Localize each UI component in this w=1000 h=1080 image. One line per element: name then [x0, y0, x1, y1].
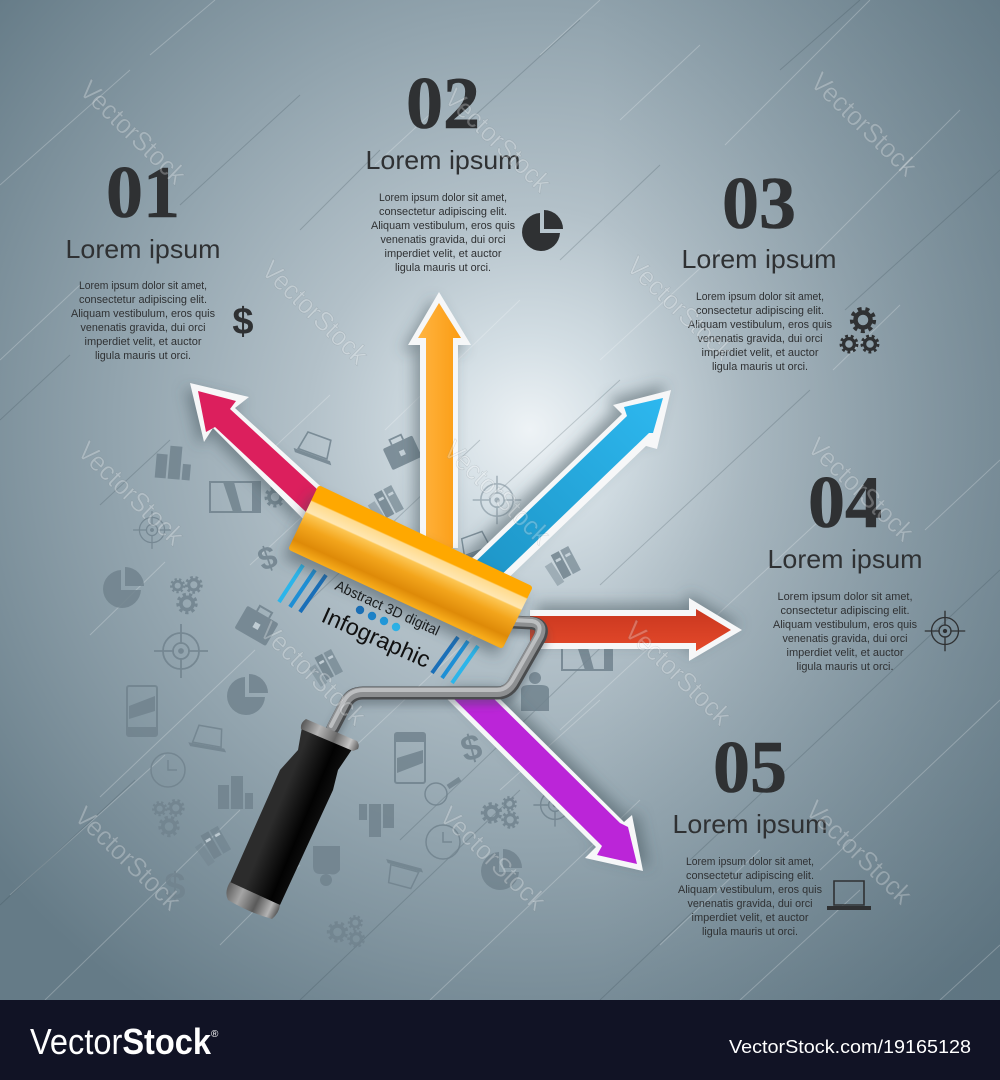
text 03: ligula mauris ut orci. — [712, 361, 808, 373]
text 01: Aliquam vestibulum, eros quis — [71, 308, 215, 320]
watermarks: VectorStock — [802, 432, 920, 547]
handle end cap — [226, 882, 280, 919]
icon: target — [925, 611, 965, 651]
footer bar — [0, 1000, 1000, 1080]
label: Abstract 3D digital: Abstract 3D digital — [332, 578, 442, 640]
background business icons: $ — [456, 725, 486, 770]
text 02: ligula mauris ut orci. — [395, 262, 491, 274]
text 03 — [688, 291, 832, 373]
watermarks: VectorStock — [438, 435, 556, 550]
watermarks: VectorStock — [619, 616, 737, 731]
watermarks: VectorStock — [434, 801, 552, 916]
text 01: venenatis gravida, dui orci — [80, 322, 206, 334]
heading 03: Lorem ipsum — [682, 244, 836, 274]
block 01 — [66, 152, 254, 362]
background business icons: $ — [253, 538, 282, 578]
roller cylinder — [292, 489, 529, 645]
arrow 1: pink — [185, 383, 330, 531]
watermarks: VectorStock — [256, 255, 374, 370]
handle collar — [301, 719, 359, 751]
text 05: Lorem ipsum dolor sit amet, — [686, 856, 814, 868]
watermarks: VectorStock — [69, 801, 187, 916]
text 01: ligula mauris ut orci. — [95, 350, 191, 362]
text 02: imperdiet velit, et auctor — [384, 248, 502, 260]
block 03 — [682, 163, 878, 373]
text 04: consectetur adipiscing elit. — [780, 605, 910, 617]
arrow 5: purple — [440, 688, 649, 871]
watermarks: VectorStock — [439, 83, 557, 198]
paint roller — [226, 489, 541, 919]
block 05 — [672, 727, 871, 938]
text 04 — [773, 591, 917, 673]
text 04: imperdiet velit, et auctor — [786, 647, 904, 659]
heading 05: Lorem ipsum — [672, 809, 828, 839]
roller frame wire — [331, 620, 541, 734]
text 02: venenatis gravida, dui orci — [380, 234, 506, 246]
text 05 — [678, 856, 822, 938]
text 05: Aliquam vestibulum, eros quis — [678, 884, 822, 896]
text 04: Lorem ipsum dolor sit amet, — [778, 591, 912, 603]
number 04: 04 — [808, 462, 882, 544]
background business icons: $ — [164, 866, 186, 908]
text 05: imperdiet velit, et auctor — [692, 912, 809, 924]
watermarks: VectorStock — [621, 251, 739, 366]
text 01: imperdiet velit, et auctor — [84, 336, 202, 348]
text 03: venenatis gravida, dui orci — [698, 333, 822, 345]
text 03: Aliquam vestibulum, eros quis — [688, 319, 832, 331]
text 01: Lorem ipsum dolor sit amet, — [79, 280, 207, 292]
arrow 2: orange — [402, 292, 471, 554]
label: Infographic: Infographic — [318, 602, 435, 673]
text 02: Aliquam vestibulum, eros quis — [371, 220, 515, 232]
decorative blue stripes right — [432, 637, 478, 683]
watermarks: VectorStock — [74, 75, 192, 190]
icon: laptop — [827, 881, 871, 910]
roller shadow — [283, 494, 526, 656]
number 01: 01 — [106, 152, 180, 234]
text 04: venenatis gravida, dui orci — [782, 633, 908, 645]
background business icons — [103, 429, 612, 946]
text 01 — [71, 280, 215, 362]
heading 02: Lorem ipsum — [366, 145, 520, 175]
text 04: ligula mauris ut orci. — [796, 661, 894, 673]
heading 04: Lorem ipsum — [768, 544, 922, 574]
watermarks: VectorStock — [72, 436, 190, 551]
decorative blue stripes left — [279, 565, 326, 612]
text 04: Aliquam vestibulum, eros quis — [773, 619, 917, 631]
icon: dollar: $ — [232, 301, 254, 343]
watermarks: VectorStock — [805, 67, 923, 182]
footer image id: VectorStock.com/19165128 — [729, 1037, 971, 1057]
watermarks: VectorStock — [800, 795, 918, 910]
footer registered mark: ® — [211, 1029, 219, 1040]
watermarks: VectorStock — [254, 616, 372, 731]
heading 01: Lorem ipsum — [66, 234, 220, 264]
text 02 — [371, 192, 515, 274]
block 02 — [366, 63, 563, 274]
text 03: Lorem ipsum dolor sit amet, — [696, 291, 824, 303]
text 05: consectetur adipiscing elit. — [686, 870, 814, 882]
text 02: Lorem ipsum dolor sit amet, — [379, 192, 507, 204]
watermarks — [69, 67, 923, 916]
text 05: venenatis gravida, dui orci — [688, 898, 812, 910]
dots — [356, 606, 400, 631]
icon: pie chart — [522, 210, 563, 251]
text 05: ligula mauris ut orci. — [702, 926, 798, 938]
arrow 4: red — [530, 592, 742, 661]
number 03: 03 — [722, 163, 796, 245]
text 03: consectetur adipiscing elit. — [696, 305, 824, 317]
arrow 3: blue — [459, 384, 671, 586]
number 02: 02 — [406, 63, 480, 145]
text 02: consectetur adipiscing elit. — [379, 206, 507, 218]
text 01: consectetur adipiscing elit. — [79, 294, 207, 306]
footer logo: VectorStock — [30, 1021, 212, 1062]
icon: gears — [841, 309, 878, 352]
handle grip — [230, 727, 353, 905]
block 04 — [768, 462, 965, 673]
number 05: 05 — [713, 727, 787, 809]
text 03: imperdiet velit, et auctor — [702, 347, 819, 359]
